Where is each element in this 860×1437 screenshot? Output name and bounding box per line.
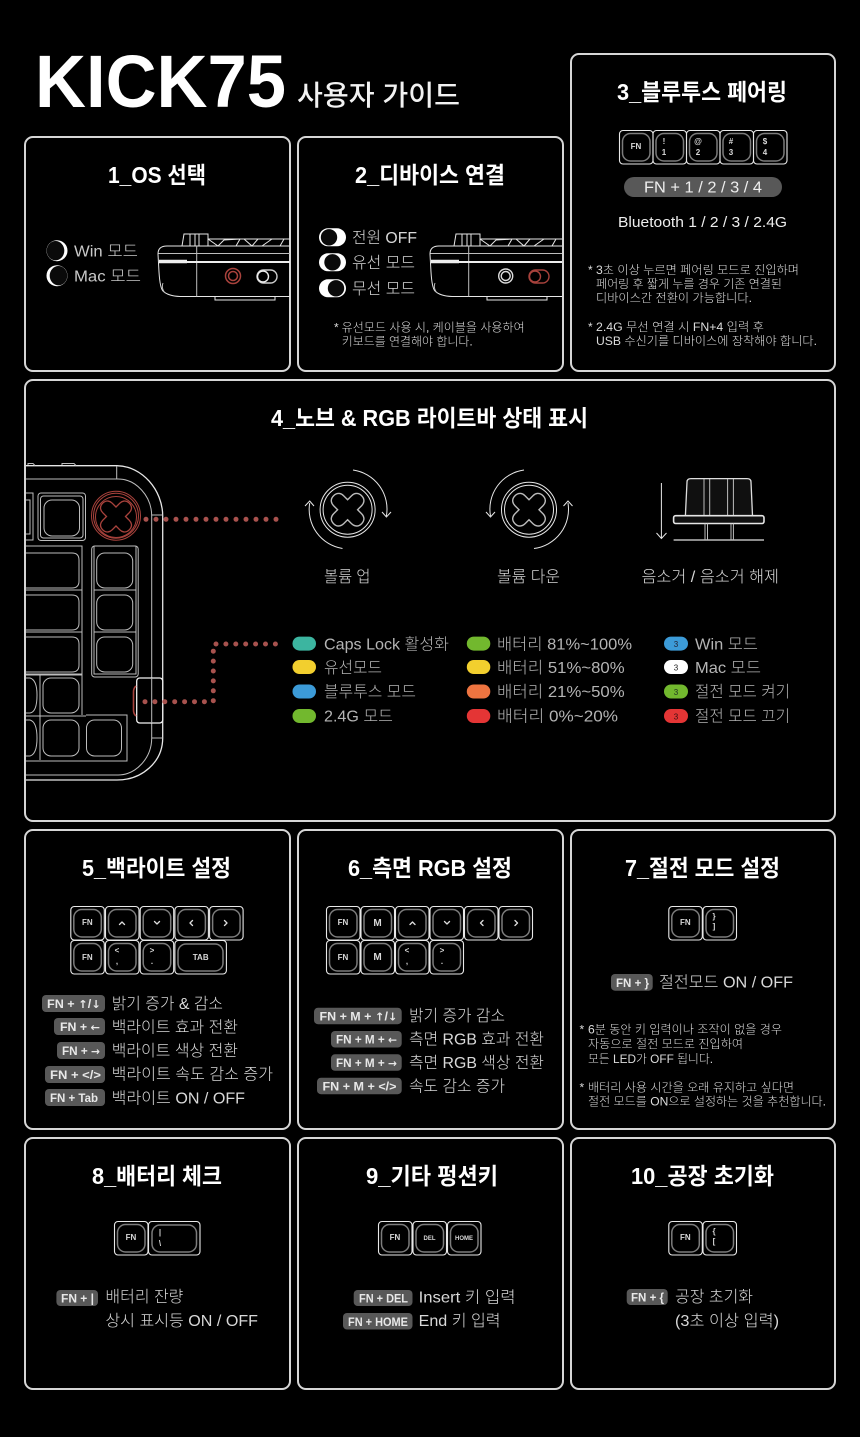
keys: FN DEL HOME: [378, 1222, 481, 1255]
title: [35, 40, 460, 123]
panel: 7 power saving mode: [571, 830, 835, 1129]
shortcut list: backlight: FN + →: [62, 1044, 100, 1058]
shortcut: factory reset: 공장 초기화: [675, 1288, 753, 1306]
panel: 6 side RGB settings: [298, 830, 563, 1129]
shortcut list: backlight: FN + ←: [60, 1020, 100, 1034]
keys: side RGB shortcuts: .: [441, 957, 443, 966]
toggle: wireless mode: [319, 279, 346, 297]
legend: status colours column 1: 블루투스 모드: [324, 683, 416, 701]
icon: volume up knob: [305, 470, 391, 548]
keys: FN 1 2 3 4: #: [729, 137, 734, 146]
note: 2.4G wireless: 2.4G 무선 연결 시 FN+4 입력 후: [596, 320, 764, 334]
label: power off: 전원 OFF: [352, 229, 417, 247]
note: 2.4G wireless: *: [588, 320, 593, 334]
toggle: power off: [319, 228, 346, 246]
shortcut: power saving: [611, 974, 793, 992]
shortcut: power saving: 절전모드 ON / OFF: [659, 974, 793, 992]
note: battery life: 배터리 사용 시간을 오래 유지하고 싶다면: [588, 1080, 794, 1094]
note: battery life: [580, 1080, 826, 1108]
note: wired mode cable: 유선모드 사용 시, 케이블을 사용하여: [342, 321, 525, 335]
keys: backlight shortcuts: >: [150, 946, 155, 955]
panel: 1 OS select: [25, 137, 290, 371]
keys: FN 1 2 3 4: 1: [662, 148, 667, 157]
heading: 2 device connection: 2_디바이스 연결: [355, 162, 505, 188]
keys: FN 1 2 3 4: 2: [696, 148, 701, 157]
legend: status colours column 3: Win 모드: [695, 636, 758, 654]
legend: status colours column 2: [467, 636, 632, 726]
keys: backlight shortcuts: ,: [116, 957, 118, 966]
legend: status colours column 2: 배터리 21%~50%: [497, 683, 625, 701]
panel: 2 device connection: [298, 137, 563, 371]
shortcut list: side RGB: 측면 RGB 효과 전환: [409, 1030, 544, 1048]
keys: side RGB shortcuts: ,: [406, 957, 408, 966]
keys: FN + }: }: [712, 912, 716, 921]
shortcut list: backlight: 백라이트 효과 전환: [112, 1018, 238, 1036]
heading: 6 side RGB: 6_측면 RGB 설정: [348, 855, 512, 881]
legend: status colours column 3: 3: [674, 664, 679, 672]
shortcut: battery level: 상시 표시등 ON / OFF: [105, 1312, 258, 1330]
shortcut: battery level: [56, 1288, 258, 1330]
keys: FN + {: {: [712, 1227, 716, 1236]
keys: backlight shortcuts: <: [115, 946, 120, 955]
note: pairing mode: 디바이스간 전환이 가능합니다.: [596, 291, 752, 305]
keys: side RGB shortcuts: [326, 906, 532, 974]
shortcut list: side RGB: FN + M + ←: [336, 1032, 397, 1046]
keys: FN + |: FN: [126, 1233, 137, 1242]
panel: 5 backlight settings: [25, 830, 290, 1129]
icon: mute press knob: [656, 479, 764, 540]
heading: 7 power saving: 7_절전 모드 설정: [625, 855, 780, 881]
keys: FN + {: [: [713, 1237, 716, 1246]
keys: backlight shortcuts: [71, 906, 243, 974]
keys: backlight shortcuts: FN: [82, 953, 93, 962]
shortcut: factory reset: [627, 1288, 779, 1330]
shortcut list: backlight: 백라이트 속도 감소 증가: [112, 1066, 273, 1084]
note: 2.4G wireless: USB 수신기를 디바이스에 장착해야 합니다.: [596, 334, 817, 348]
shortcut: power saving: FN + }: [616, 976, 649, 990]
icon: volume down knob: [486, 470, 572, 548]
legend: status colours column 3: 3: [674, 712, 679, 722]
shortcut list: side RGB: 측면 RGB 색상 전환: [409, 1054, 544, 1072]
toggle: Mac mode: [46, 265, 68, 286]
note: 2.4G wireless: [588, 320, 817, 348]
keys: FN 1 2 3 4: FN: [631, 142, 642, 151]
legend: status colours column 3: 절전 모드 끄기: [695, 708, 790, 726]
heading: 1 OS select: 1_OS 선택: [108, 162, 206, 188]
shortcut list: backlight: 백라이트 ON / OFF: [112, 1090, 245, 1108]
shortcut: insert: Insert 키 입력: [419, 1288, 516, 1306]
keys: side RGB shortcuts: >: [440, 946, 445, 955]
note: auto sleep: 모든 LED가 OFF 됩니다.: [588, 1052, 713, 1066]
keys: backlight shortcuts: FN: [82, 918, 93, 927]
shortcut: insert: [354, 1288, 516, 1306]
keys: side RGB shortcuts: FN: [338, 918, 349, 927]
note: wired mode cable: *: [334, 321, 339, 335]
shortcut: factory reset: FN + {: [631, 1290, 664, 1304]
note: battery life: 절전 모드를 ON으로 설정하는 것을 추천합니다.: [588, 1094, 826, 1108]
keys: FN + }: ]: [713, 922, 716, 931]
toggle: Win mode: [46, 240, 68, 261]
label: wired mode: 유선 모드: [352, 254, 415, 272]
legend: status colours column 2: 배터리 81%~100%: [497, 636, 632, 654]
title: 사용자 가이드: [297, 80, 460, 111]
shortcut list: backlight: [42, 995, 273, 1108]
note: battery life: *: [580, 1080, 584, 1094]
keys: FN 1 2 3 4: 3: [729, 148, 734, 157]
toggle: wired mode: [319, 253, 346, 271]
legend: status colours column 1: 2.4G 모드: [324, 708, 393, 726]
shortcut: battery level: 배터리 잔량: [105, 1288, 184, 1306]
dotted leader: light bar: [145, 644, 277, 702]
label: Mac mode: Mac 모드: [74, 268, 141, 286]
legend: status colours column 3: Mac 모드: [695, 660, 761, 677]
note: wired mode cable: 키보드를 연결해야 합니다.: [342, 335, 473, 349]
panel: 3 bluetooth pairing: [571, 54, 835, 371]
pill: FN + 1/2/3/4: FN + 1 / 2 / 3 / 4: [644, 180, 762, 196]
pill: FN + 1/2/3/4: [624, 177, 782, 197]
legend: status colours column 3: 3: [674, 688, 679, 697]
keys: FN DEL HOME: FN: [390, 1233, 401, 1242]
keys: FN 1 2 3 4: [620, 130, 787, 164]
heading: 10 factory reset: 10_공장 초기화: [631, 1163, 774, 1189]
keys: side RGB shortcuts: FN: [338, 953, 349, 962]
title: KICK75: [35, 40, 286, 123]
note: pairing mode: *: [588, 263, 593, 277]
panel: 10 factory reset: [571, 1138, 835, 1389]
legend: status colours column 3: [664, 636, 790, 726]
label: Win mode: Win 모드: [74, 244, 138, 260]
shortcut list: backlight: 백라이트 색상 전환: [112, 1042, 238, 1060]
label: wireless mode: 무선 모드: [352, 280, 415, 298]
keys: side RGB shortcuts: M: [373, 918, 382, 929]
shortcut list: side RGB: FN + M + ↑/↓: [320, 1010, 398, 1024]
label: volume up: 볼륨 업: [324, 568, 370, 586]
keys: FN 1 2 3 4: $: [763, 137, 768, 146]
keys: FN + {: FN: [680, 1233, 691, 1242]
label: mute / unmute: 음소거 / 음소거 해제: [642, 568, 779, 586]
shortcut list: side RGB: 속도 감소 증가: [409, 1078, 505, 1096]
shortcut: end: End 키 입력: [419, 1312, 501, 1330]
keys: FN + }: [669, 906, 736, 940]
legend: status colours column 1: Caps Lock 활성화: [324, 636, 449, 654]
illustration: keyboard top view: [26, 464, 163, 780]
legend: status colours column 1: 유선모드: [324, 659, 382, 677]
keys: FN + {: [669, 1222, 736, 1255]
keys: side RGB shortcuts: <: [405, 946, 410, 955]
panel: 8 battery check: [25, 1138, 290, 1389]
heading: 9 other function keys: 9_기타 펑션키: [366, 1163, 498, 1189]
shortcut list: side RGB: [314, 1007, 544, 1096]
text: bluetooth slots: Bluetooth 1 / 2 / 3 / 2.4G: [618, 215, 787, 231]
label: volume down: 볼륨 다운: [497, 568, 560, 586]
note: pairing mode: 3초 이상 누르면 페어링 모드로 진입하며: [596, 263, 799, 277]
keys: FN + }: FN: [680, 918, 691, 927]
note: pairing mode: [588, 263, 799, 305]
shortcut: insert: FN + DEL: [359, 1292, 408, 1306]
note: pairing mode: 페어링 후 짧게 누를 경우 기존 연결된: [596, 277, 782, 291]
legend: status colours column 3: 절전 모드 켜기: [695, 683, 790, 701]
shortcut list: backlight: 밝기 증가 & 감소: [112, 995, 223, 1013]
illustration: keyboard side view: [430, 234, 562, 300]
keys: FN 1 2 3 4: 4: [763, 148, 768, 157]
keys: FN + |: |: [159, 1228, 161, 1237]
keys: FN + |: \: [159, 1239, 162, 1248]
shortcut: factory reset: (3초 이상 입력): [675, 1312, 779, 1330]
heading: 5 backlight: 5_백라이트 설정: [82, 855, 231, 881]
legend: status colours column 2: 배터리 0%~20%: [497, 708, 618, 726]
shortcut: end: [343, 1312, 501, 1330]
note: auto sleep: 자동으로 절전 모드로 진입하여: [588, 1037, 743, 1051]
heading: 3 bluetooth pairing: 3_블루투스 페어링: [617, 79, 787, 105]
shortcut: end: FN + HOME: [348, 1315, 408, 1329]
note: auto sleep: *: [580, 1022, 584, 1036]
note: wired mode cable: [334, 321, 525, 349]
keys: FN DEL HOME: HOME: [455, 1236, 473, 1242]
heading: 8 battery check: 8_배터리 체크: [92, 1163, 222, 1189]
shortcut list: side RGB: 밝기 증가 감소: [409, 1007, 505, 1025]
panel: 4 knob and RGB light bar: [25, 380, 835, 821]
keys: FN DEL HOME: DEL: [424, 1236, 436, 1242]
legend: status colours column 2: 배터리 51%~80%: [497, 659, 625, 677]
shortcut list: backlight: FN + ↑/↓: [47, 997, 101, 1011]
shortcut list: backlight: FN + </>: [50, 1068, 101, 1082]
keys: side RGB shortcuts: M: [373, 952, 382, 963]
panel: 9 other function keys: [298, 1138, 563, 1389]
shortcut list: side RGB: FN + M + </>: [322, 1080, 396, 1094]
shortcut list: side RGB: FN + M + →: [336, 1056, 397, 1070]
keys: FN 1 2 3 4: !: [663, 137, 665, 146]
note: auto sleep: 6분 동안 키 입력이나 조작이 없을 경우: [588, 1022, 782, 1036]
keys: backlight shortcuts: TAB: [193, 953, 209, 962]
illustration: keyboard side view: [158, 234, 290, 300]
dotted leader: knob: [146, 517, 277, 522]
legend: status colours column 1: [292, 636, 449, 726]
shortcut list: backlight: FN + Tab: [50, 1091, 98, 1105]
keys: FN + |: [114, 1222, 200, 1255]
keys: backlight shortcuts: .: [151, 957, 153, 966]
shortcut: battery level: FN + |: [61, 1292, 94, 1306]
keys: FN 1 2 3 4: @: [694, 137, 702, 146]
legend: status colours column 3: 3: [674, 640, 679, 649]
heading: 4 knob and RGB: 4_노브 & RGB 라이트바 상태 표시: [271, 405, 588, 431]
note: auto sleep: [580, 1022, 782, 1066]
